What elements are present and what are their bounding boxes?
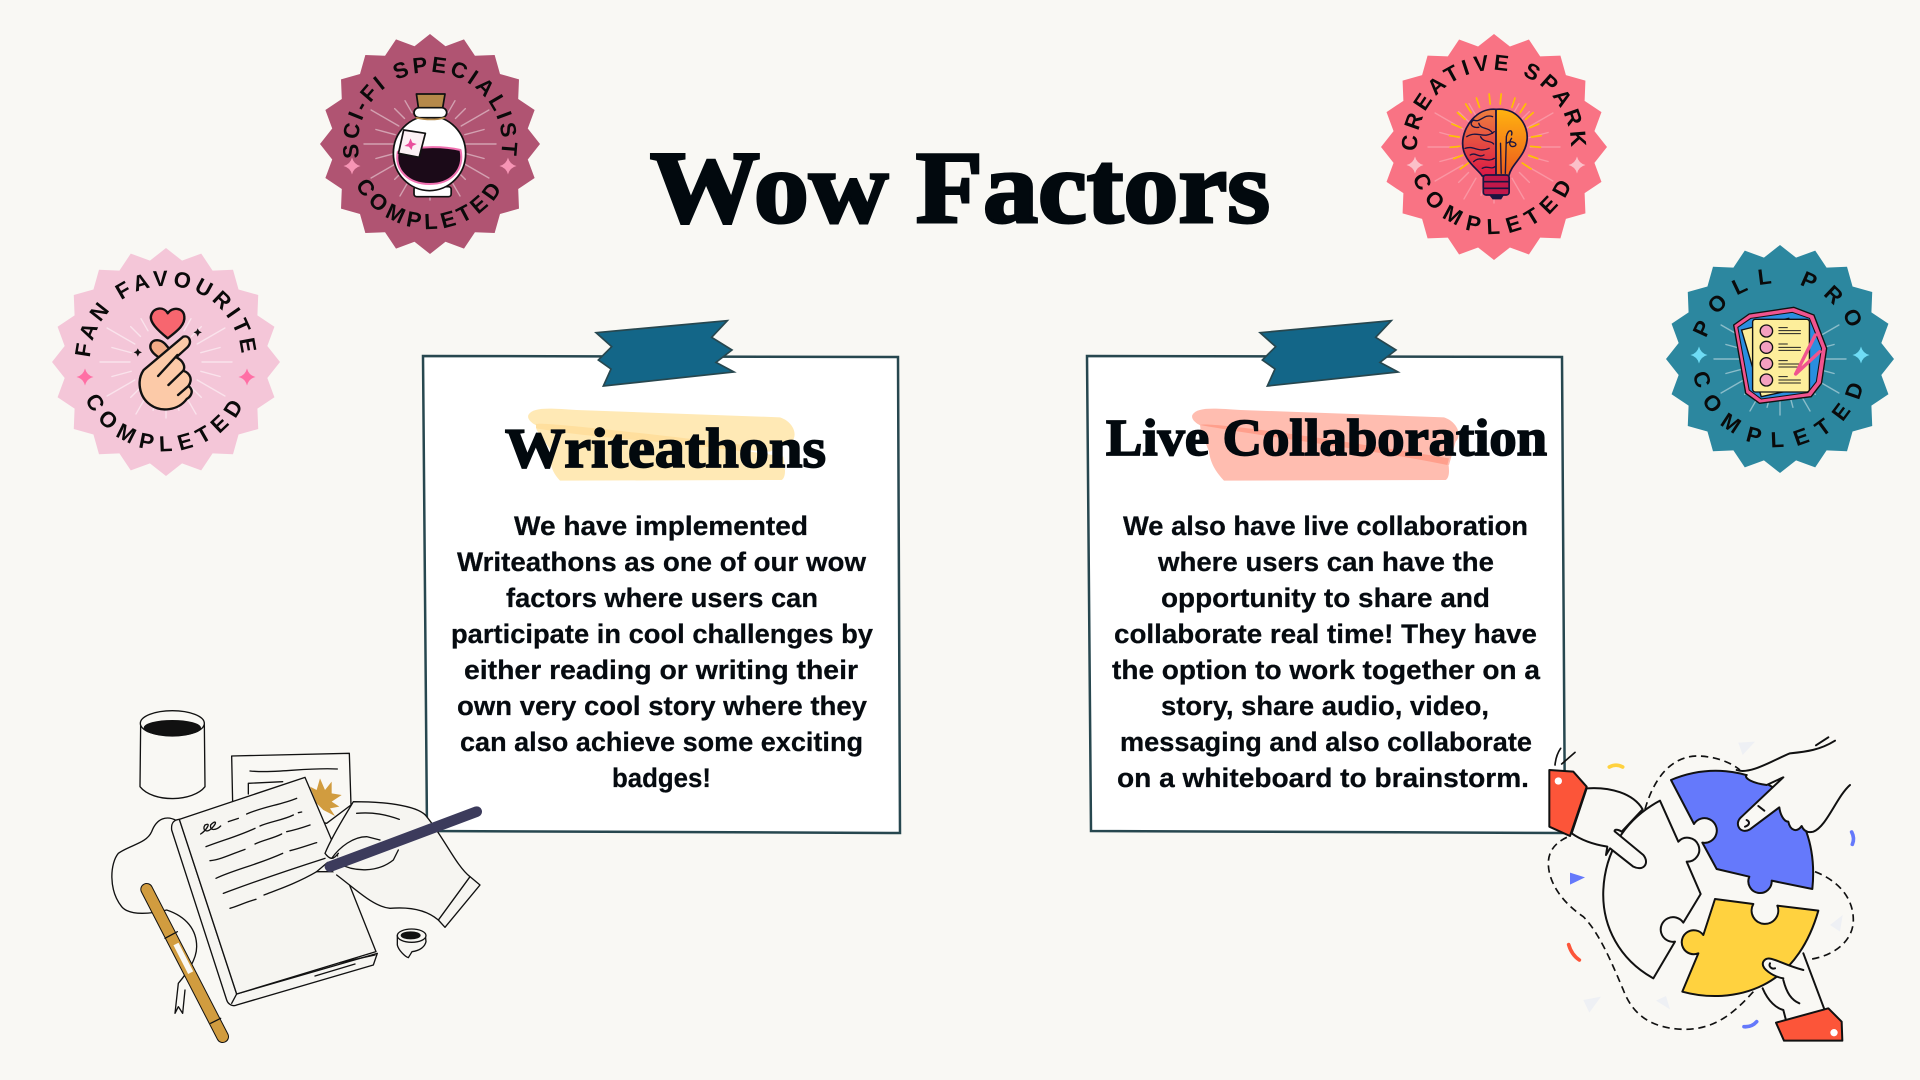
notebook bbox=[172, 777, 377, 1006]
body text: the option to work together on a bbox=[1112, 655, 1541, 685]
icon: potion bottle bbox=[393, 94, 466, 197]
white puzzle piece bbox=[1603, 801, 1701, 978]
tape bbox=[1260, 321, 1398, 386]
strap bbox=[112, 818, 197, 1013]
highlighter stroke bbox=[1192, 409, 1459, 481]
left hand and cuff bbox=[1549, 748, 1646, 868]
panel: live collaboration bbox=[1087, 321, 1565, 833]
yellow puzzle piece bbox=[1682, 899, 1818, 996]
gold pen bbox=[147, 889, 223, 1037]
icon: brain lightbulb bbox=[1450, 94, 1541, 199]
body text bbox=[1112, 511, 1541, 793]
highlighter stroke bbox=[528, 409, 795, 481]
blue puzzle piece bbox=[1671, 771, 1813, 893]
top right hand bbox=[1737, 737, 1850, 832]
badge shape and lettering: COMPLETED bbox=[87, 394, 240, 452]
icon: poll sheets bbox=[1734, 307, 1827, 403]
navy pencil bbox=[317, 812, 477, 872]
confetti bbox=[1569, 742, 1854, 1027]
illustration: writing in notebook bbox=[112, 711, 480, 1037]
badge shape and lettering: FAN FAVOURITE bbox=[74, 270, 256, 356]
badge shape and lettering bbox=[320, 34, 540, 254]
badge shape and lettering: CREATIVE SPARK bbox=[1402, 54, 1586, 150]
icon: finger heart bbox=[134, 309, 202, 409]
body text: opportunity to share and bbox=[1161, 583, 1490, 613]
badge: creative spark bbox=[1381, 34, 1607, 260]
badge shape and lettering bbox=[1666, 245, 1894, 473]
body text: either reading or writing their bbox=[464, 655, 859, 685]
heading: Live Collaboration bbox=[1106, 410, 1547, 467]
body text: messaging and also collaborate bbox=[1120, 727, 1532, 757]
body text: Writeathons as one of our wow bbox=[457, 547, 867, 577]
body text: participate in cool challenges by bbox=[451, 619, 873, 649]
body text: own very cool story where they bbox=[457, 691, 867, 721]
hand bbox=[325, 802, 480, 927]
tape measure bbox=[397, 929, 426, 958]
coffee cup bbox=[140, 711, 205, 799]
body text: We have implemented bbox=[514, 511, 808, 541]
heading: Writeathons bbox=[505, 418, 826, 480]
badge shape and lettering: COMPLETED bbox=[1694, 372, 1862, 448]
back sheet with gold star bbox=[232, 753, 351, 823]
badge shape and lettering bbox=[52, 248, 280, 476]
card outline bbox=[1087, 356, 1565, 833]
badge shape and lettering: SCI-FI SPECIALIST bbox=[343, 56, 518, 158]
body text: collaborate real time! They have bbox=[1114, 619, 1537, 649]
body text: where users can have the bbox=[1157, 547, 1494, 577]
body text: story, share audio, video, bbox=[1161, 691, 1489, 721]
body text: badges! bbox=[612, 763, 711, 793]
body text: We also have live collaboration bbox=[1123, 511, 1528, 541]
badge: poll pro bbox=[1666, 245, 1894, 473]
badge shape and lettering: POLL PRO bbox=[1692, 269, 1861, 337]
dashed path bbox=[1548, 756, 1853, 1029]
illustration: puzzle hands bbox=[1548, 737, 1854, 1041]
handwriting bbox=[201, 798, 325, 908]
title: Wow Factors bbox=[650, 131, 1270, 245]
badge shape and lettering: COMPLETED bbox=[358, 180, 499, 230]
tape bbox=[596, 321, 734, 386]
badge shape and lettering: COMPLETED bbox=[1414, 174, 1570, 234]
badge: fan favourite bbox=[52, 248, 280, 476]
badge: sci-fi specialist bbox=[320, 34, 540, 254]
bottom hand and cuff bbox=[1763, 953, 1842, 1041]
body text: can also achieve some exciting bbox=[460, 727, 863, 757]
card outline bbox=[423, 356, 900, 833]
body text bbox=[451, 511, 873, 793]
body text: on a whiteboard to brainstorm. bbox=[1117, 763, 1529, 793]
panel: writeathons bbox=[423, 321, 900, 833]
body text: factors where users can bbox=[506, 583, 818, 613]
badge shape and lettering bbox=[1381, 34, 1607, 260]
